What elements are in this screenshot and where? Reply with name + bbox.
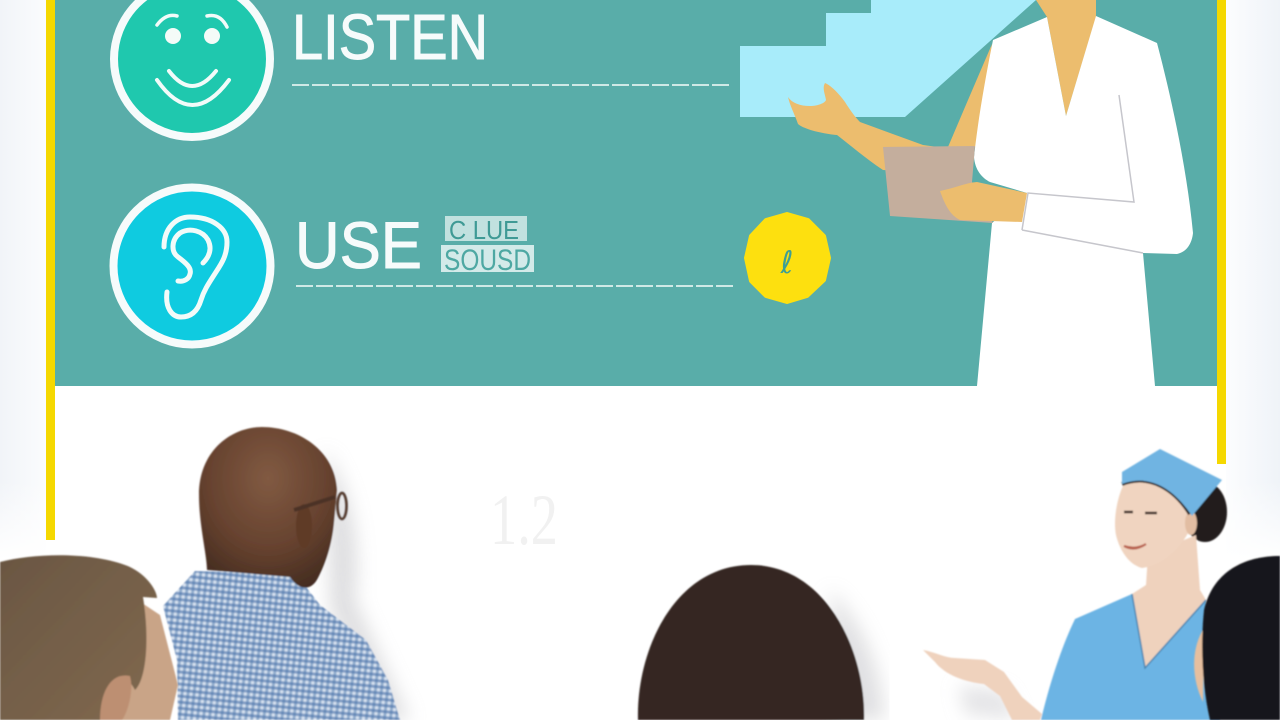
- nurse hairline: [1122, 481, 1190, 514]
- nurse neck and chest: [1132, 535, 1206, 668]
- nurse eyes: [1124, 512, 1157, 513]
- illustration: presenter in white coat: [788, 0, 1193, 386]
- garbled sub-label: [441, 215, 534, 277]
- yellow badge: [746, 214, 829, 302]
- nurse V-neck trim: [1132, 594, 1206, 668]
- yellow badge: ℓ: [780, 245, 793, 281]
- center person shadow: [830, 590, 885, 720]
- garbled sub-label: SOUSD: [444, 244, 531, 277]
- garbled sub-label: C LUE: [449, 215, 519, 245]
- nurse scrubs: [1041, 594, 1220, 720]
- heading: LISTEN: LISTEN: [292, 1, 488, 73]
- divider line under LISTEN: [292, 84, 729, 86]
- nurse arm and hand: [923, 650, 1042, 720]
- foreground man face: [90, 595, 178, 720]
- presenter back arm: [948, 44, 992, 147]
- center person hair: [638, 565, 864, 720]
- coat sleeve seams: [1022, 95, 1143, 253]
- tablet: [883, 146, 993, 223]
- presenter forward arm and hand: [788, 83, 960, 175]
- man ear: [296, 504, 312, 548]
- right person face edge: [1194, 628, 1204, 702]
- glasses lens: [338, 493, 346, 519]
- right person hair: [1202, 556, 1280, 720]
- presenter neck and chin: [1036, 0, 1096, 116]
- nurse arm shadow: [958, 685, 1020, 720]
- icon: ear: [114, 188, 270, 344]
- foreground man hair: [0, 555, 157, 720]
- presenter hand on tablet: [940, 182, 1027, 222]
- person: man in foreground left: [0, 555, 178, 720]
- nurse face: [1115, 477, 1194, 568]
- light-blue stepped shape: [740, 0, 1036, 117]
- nurse hair bun: [1183, 482, 1227, 542]
- man glasses: [294, 497, 335, 510]
- right yellow frame bar: [1217, 0, 1226, 464]
- coat sleeve cuff: [1022, 193, 1143, 253]
- man head and neck: [199, 427, 337, 588]
- left yellow frame bar: [46, 0, 55, 540]
- presenter white coat: [974, 16, 1193, 386]
- divider line under USE: [296, 285, 736, 287]
- panel: teal presentation board: [55, 0, 1217, 386]
- faded number on whiteboard: 1.2: [490, 480, 558, 560]
- man shirt: [163, 571, 400, 720]
- icon: smiling face: [114, 0, 270, 137]
- person: dark-haired woman foreground right: [1194, 556, 1280, 720]
- nurse ear: [1185, 511, 1197, 535]
- nurse cap: [1122, 449, 1222, 516]
- nurse mouth: [1124, 544, 1146, 549]
- person: nurse presenter: [923, 449, 1227, 720]
- person: woman seen from behind, center: [638, 565, 885, 720]
- foreground man ear: [100, 675, 131, 720]
- heading: USE: USE: [295, 208, 422, 282]
- man shadow: [325, 450, 410, 720]
- person: bald man with glasses: [163, 427, 410, 720]
